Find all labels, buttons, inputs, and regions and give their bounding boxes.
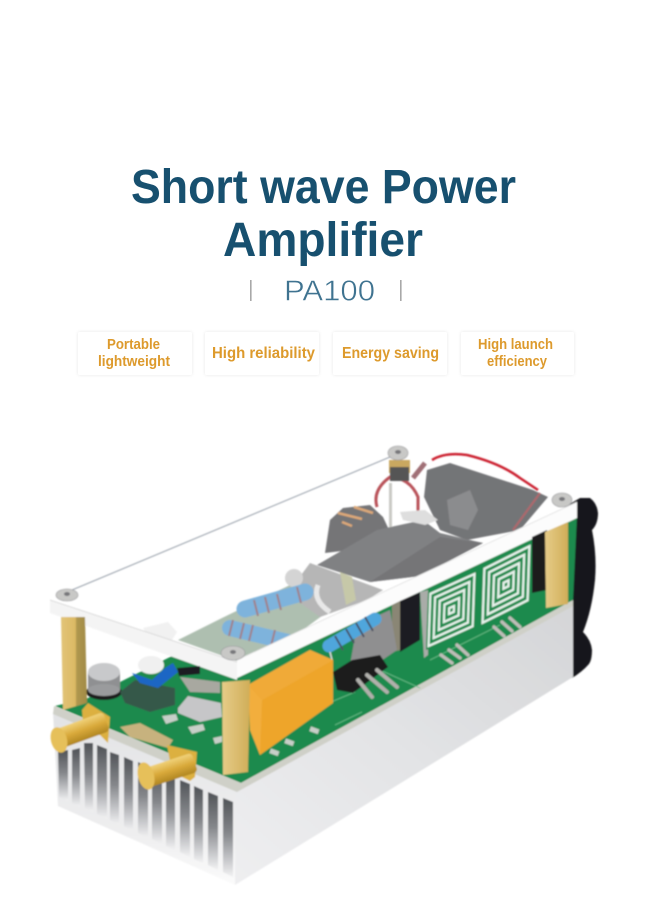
feature card: high launch efficiency: efficiency	[487, 353, 548, 370]
fan body seen through acrylic	[424, 463, 548, 540]
feature card: high reliability	[205, 332, 319, 375]
screws	[56, 446, 572, 660]
circuit board	[53, 515, 577, 792]
washed sub-board	[178, 585, 330, 662]
title: Short wave Power	[131, 161, 516, 214]
silver shielded block	[285, 563, 383, 617]
model subtitle: PA100: PA100	[284, 276, 375, 308]
fan end behind coil	[532, 530, 547, 593]
toroid inductor	[325, 505, 390, 553]
brass standoff front	[222, 680, 250, 775]
coil leads	[441, 618, 520, 663]
feature card: energy saving	[333, 332, 447, 375]
blue resistor front	[329, 617, 375, 660]
SMA connector right	[135, 745, 198, 792]
feature card: portable lightweight	[78, 332, 192, 375]
washed upper resistor	[245, 587, 305, 616]
brass standoff left	[61, 617, 87, 710]
capacitor	[86, 663, 122, 700]
board components near trimmer	[120, 666, 222, 722]
title	[131, 161, 516, 267]
feature card: high launch efficiency: High launch	[478, 336, 553, 353]
feature card: high launch efficiency	[461, 332, 574, 375]
feature card: portable lightweight: lightweight	[98, 353, 170, 370]
feature card: high reliability: High reliability	[212, 345, 315, 362]
washed lower resistor	[229, 620, 288, 646]
product illustration: amplifier module	[48, 446, 598, 885]
washed wires and rear post	[376, 460, 540, 530]
blue trimmer potentiometer	[132, 656, 178, 688]
heatsink end face with fins	[53, 712, 237, 885]
chip with leads	[333, 655, 397, 697]
relay	[248, 650, 333, 755]
spiral coil left	[420, 570, 477, 658]
cooling fan	[568, 498, 598, 678]
feature card: portable lightweight: Portable	[107, 336, 160, 353]
acrylic cover	[50, 457, 577, 680]
heatsink side face	[235, 603, 573, 885]
brass standoff right	[545, 522, 568, 608]
red wire above fan	[432, 454, 538, 490]
power transistor and solder	[350, 592, 420, 665]
title: Amplifier	[223, 214, 423, 267]
spiral coil right	[480, 542, 532, 627]
feature card: energy saving: Energy saving	[342, 345, 439, 362]
SMA connector left	[48, 703, 110, 755]
transformer tubes	[317, 520, 483, 582]
white connector	[143, 622, 177, 640]
